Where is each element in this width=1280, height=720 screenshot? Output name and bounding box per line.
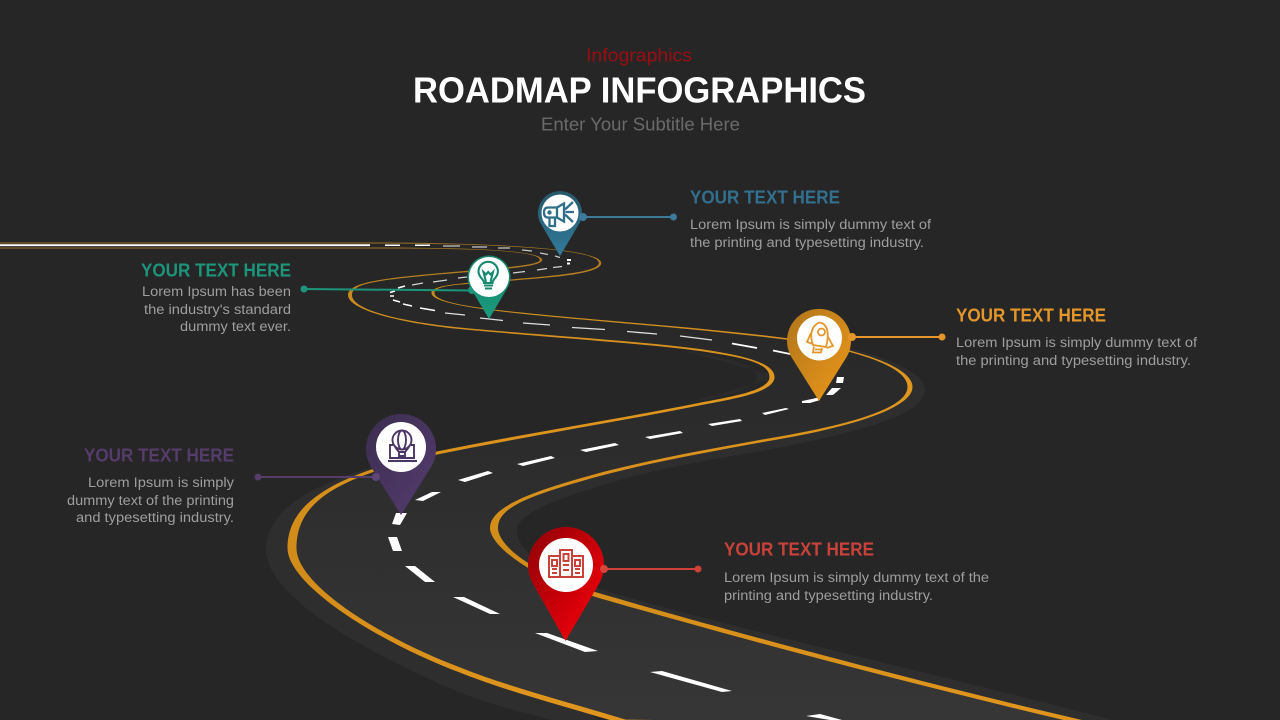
body text: Lorem Ipsum is simply dummy text of	[690, 217, 931, 233]
heading: YOUR TEXT HERE	[956, 304, 1106, 326]
body text: the printing and typesetting industry.	[956, 353, 1191, 369]
body text: printing and typesetting industry.	[724, 588, 933, 604]
icon: rocket	[797, 316, 842, 360]
heading: YOUR TEXT HERE	[690, 186, 840, 208]
connector end dot	[670, 214, 677, 220]
connector start dot	[468, 286, 476, 294]
body text: Lorem Ipsum is simply dummy text of	[956, 335, 1197, 351]
heading: YOUR TEXT HERE	[141, 260, 291, 280]
title block	[413, 46, 866, 134]
body text: Lorem Ipsum has been	[142, 284, 291, 300]
road surface	[0, 244, 1090, 720]
icon: light bulb	[469, 257, 509, 297]
body text: the printing and typesetting industry.	[690, 235, 924, 251]
pin	[528, 527, 604, 641]
connector start dot	[600, 565, 608, 573]
icon: megaphone	[542, 194, 578, 232]
winding road	[0, 242, 1120, 720]
connector	[604, 568, 698, 570]
road shoulder, outer bend side	[480, 339, 1120, 720]
road edge lines (tapered)	[0, 242, 1090, 720]
subtitle: Enter Your Subtitle Here	[541, 114, 740, 134]
step 5: red	[528, 527, 989, 641]
heading: YOUR TEXT HERE	[724, 538, 874, 560]
step 4: purple	[67, 414, 436, 526]
body text: dummy text ever.	[180, 319, 291, 335]
body text: Lorem Ipsum is simply dummy text of the	[724, 570, 989, 586]
connector start dot	[372, 473, 380, 481]
body text: dummy text of the printing	[67, 493, 234, 509]
body text: the industry's standard	[144, 302, 291, 318]
connector	[852, 336, 942, 338]
connector	[258, 476, 376, 478]
heading: YOUR TEXT HERE	[84, 444, 234, 466]
step 3: orange	[787, 304, 1197, 401]
body text: and typesetting industry.	[76, 510, 234, 526]
road centre dashes	[0, 245, 844, 720]
connector start dot	[848, 333, 856, 341]
connector end dot	[938, 334, 946, 340]
pin	[787, 309, 851, 401]
road shoulder, inner bend	[680, 350, 780, 405]
connector	[583, 216, 673, 218]
pin	[467, 255, 511, 319]
road shoulder, left bend	[266, 453, 600, 720]
icon: balloon and laptop	[376, 422, 426, 472]
connector end dot	[300, 286, 308, 292]
connector end dot	[254, 474, 262, 480]
step 1: blue	[538, 186, 931, 256]
pin	[366, 414, 436, 515]
connector end dot	[694, 566, 702, 572]
connector start dot	[579, 213, 587, 221]
eyebrow: Infographics	[586, 46, 692, 66]
step 2: green	[141, 255, 511, 335]
icon: buildings	[539, 538, 593, 592]
title: ROADMAP INFOGRAPHICS	[413, 70, 866, 110]
connector	[304, 289, 473, 290]
body text: Lorem Ipsum is simply	[88, 475, 235, 491]
pin	[538, 191, 582, 256]
